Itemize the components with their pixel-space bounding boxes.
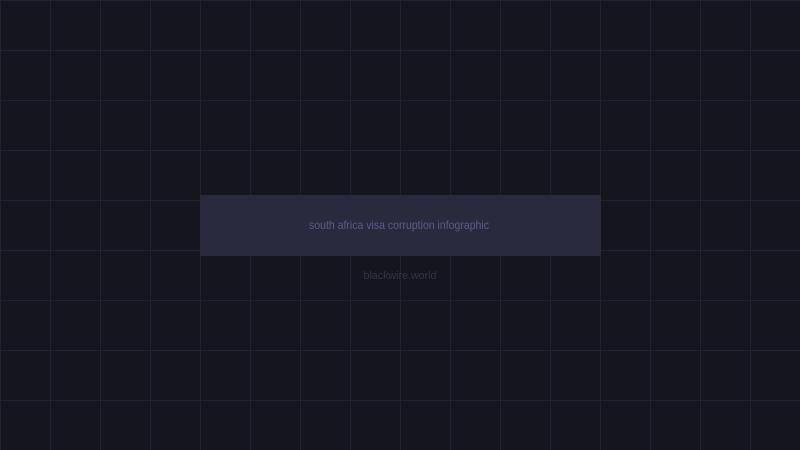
source text: blackwire.world <box>364 270 436 282</box>
title banner <box>200 195 601 256</box>
title text: south africa visa corruption infographic <box>309 218 489 232</box>
